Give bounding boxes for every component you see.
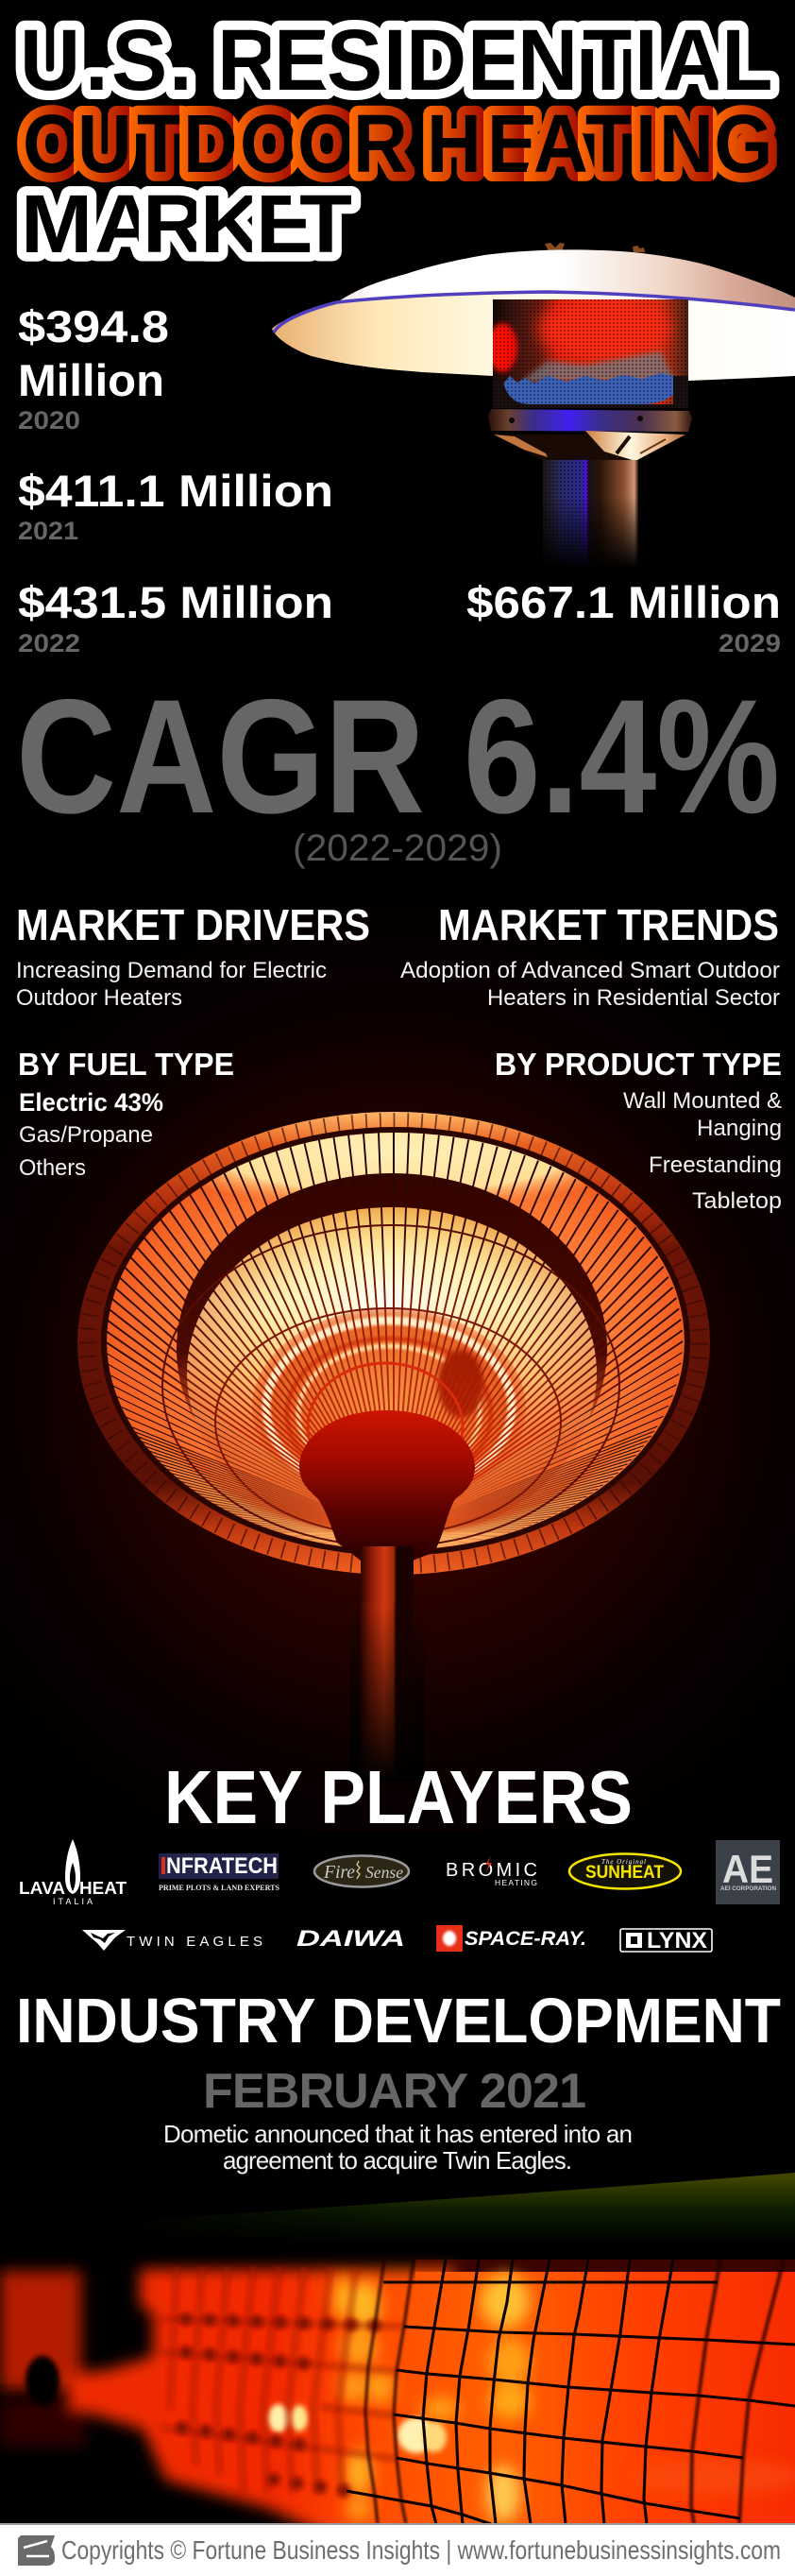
product list: Wall Mounted &	[623, 1088, 782, 1114]
value 2021: $411.1 Million	[18, 466, 333, 516]
footer	[0, 2523, 795, 2576]
value 2020: $394.8	[18, 301, 169, 351]
CAGR period: (2022-2029)	[293, 827, 502, 869]
cone vent thin	[640, 439, 666, 453]
background glow	[0, 874, 795, 1833]
value 2029	[466, 577, 781, 657]
product list	[623, 1088, 782, 1214]
value 2029: 2029	[719, 629, 781, 657]
value 2020: 2020	[18, 406, 80, 435]
logo: AEI Corporation: AEI CORPORATION	[720, 1886, 776, 1892]
logo: Space-Ray	[436, 1925, 586, 1952]
product list: Hanging	[697, 1116, 782, 1141]
title	[20, 12, 773, 270]
dim lower left	[0, 2399, 85, 2447]
radial wires lower	[105, 1353, 683, 1544]
logo: Bromic	[446, 1856, 537, 1887]
development text: agreement to acquire Twin Eagles.	[223, 2146, 572, 2175]
development date: FEBRUARY 2021	[203, 2064, 586, 2119]
drivers heading: MARKET DRIVERS	[16, 900, 370, 949]
mesh dots	[493, 299, 688, 408]
central hub	[299, 1410, 475, 1561]
image: gas patio heater	[272, 243, 795, 568]
dark left blob	[25, 2356, 59, 2405]
fuel heading: BY FUEL TYPE	[18, 1047, 234, 1082]
logo: Infratech: PRIME PLOTS & LAND EXPERTS	[159, 1883, 279, 1892]
grey mesh zone	[521, 351, 675, 382]
market drivers	[16, 900, 370, 1011]
red hot patch	[487, 323, 517, 372]
dark inner crescent	[177, 1173, 607, 1421]
logo: AEI Corporation	[716, 1840, 780, 1904]
trends text	[400, 958, 780, 1011]
heater pole	[543, 460, 638, 567]
heater finials	[545, 243, 645, 252]
rim ticks	[88, 1121, 700, 1565]
value 2022	[18, 577, 333, 657]
market trends	[400, 900, 780, 1011]
key players heading: KEY PLAYERS	[164, 1755, 633, 1839]
logo: Sunheat: SUNHEAT	[585, 1863, 664, 1883]
value 2022: 2022	[18, 629, 80, 657]
heater collar	[488, 409, 692, 432]
blurred grid left	[161, 2267, 404, 2494]
cone vents	[617, 436, 630, 453]
radial wires upper	[107, 1133, 684, 1482]
pole fade	[538, 496, 644, 568]
fuel list: Electric 43%	[19, 1088, 163, 1117]
orange glow	[538, 297, 670, 361]
dark bottom corners	[493, 376, 688, 408]
image: heater close-up	[0, 2173, 795, 2541]
logo: Sunheat	[569, 1853, 681, 1889]
title line: Market: MARKET	[21, 178, 352, 270]
value 2021	[18, 466, 333, 545]
market size figures	[18, 301, 781, 657]
heater pole	[360, 1540, 414, 1776]
rim separator	[101, 1127, 690, 1556]
logo: Fire Sense: Sense	[365, 1863, 403, 1882]
value 2020: Million	[18, 355, 164, 405]
by product type	[495, 1047, 782, 1214]
collar rivets	[512, 418, 640, 420]
element body right, sharp	[415, 2272, 795, 2541]
heater cone	[494, 431, 686, 461]
title line: Outdoor Heating: OUTDOOR HEATING	[23, 97, 772, 190]
footer bar	[0, 2524, 795, 2576]
warm highlights	[331, 2275, 795, 2522]
concentric guard wires	[162, 1225, 619, 1546]
development text	[163, 2120, 633, 2175]
logo: Lynx: LYNX	[647, 1928, 707, 1953]
soft grid middle	[365, 2260, 414, 2524]
product list: Tabletop	[692, 1188, 782, 1214]
reflector dish	[105, 1092, 685, 1550]
logo: Twin Eagles	[82, 1930, 262, 1951]
fuel list: Gas/Propane	[19, 1122, 153, 1148]
pole fade	[349, 1606, 425, 1782]
trends text: Heaters in Residential Sector	[487, 985, 780, 1011]
logo: Lava Heat: LAVA	[19, 1879, 65, 1898]
logo: Space-Ray: SPACE-RAY.	[465, 1928, 586, 1950]
logo: Lava Heat	[19, 1839, 127, 1906]
logo: Infratech: NFRATECH	[166, 1853, 278, 1879]
shade purple rim	[274, 292, 795, 333]
drivers text	[16, 958, 327, 1011]
title line: U.S. Residential: U.S. RESIDENTIAL	[20, 12, 773, 109]
development text: Dometic announced that it has entered into an	[163, 2120, 633, 2148]
logo: Daiwa: DAIWA	[296, 1926, 405, 1952]
logo: Lynx	[620, 1928, 712, 1953]
heater shade underside	[272, 292, 795, 381]
fuel list	[19, 1088, 163, 1181]
drivers text: Increasing Demand for Electric	[16, 958, 327, 983]
logo: Fire Sense: Fire	[323, 1862, 355, 1883]
sharp grid right	[347, 2260, 795, 2524]
bright inner reflector	[187, 1207, 597, 1540]
logo: Bromic: BROMIC	[446, 1860, 537, 1881]
inner cone with coil	[252, 1309, 526, 1477]
product heading: BY PRODUCT TYPE	[495, 1047, 782, 1082]
footer logo	[18, 2535, 55, 2566]
value 2022: $431.5 Million	[18, 577, 333, 627]
pole top	[361, 1546, 414, 1603]
logo: Sunheat: The Original	[601, 1858, 646, 1866]
logo: Infratech	[159, 1853, 279, 1892]
logo: Lava Heat: HEAT	[79, 1879, 127, 1898]
logo: AEI Corporation: AE	[722, 1847, 773, 1891]
key player logos	[19, 1839, 780, 1953]
glowing element	[0, 2260, 795, 2541]
logo: Lava Heat: ITALIA	[53, 1897, 93, 1906]
heater shade top	[272, 249, 795, 329]
outer rim	[77, 1112, 710, 1575]
element body left, blurred	[68, 2269, 453, 2541]
value 2029: $667.1 Million	[466, 577, 781, 627]
right grid lines, soft	[691, 2260, 784, 2524]
value 2020	[18, 301, 169, 435]
logo: Bromic: HEATING	[495, 1878, 537, 1887]
image: electric radiant heater	[0, 979, 795, 1799]
hot spot	[247, 1217, 524, 1347]
by fuel type	[18, 1047, 234, 1181]
drivers text: Outdoor Heaters	[16, 985, 182, 1011]
coil shadow	[438, 1350, 483, 1418]
mesh base	[493, 299, 688, 408]
trends text: Adoption of Advanced Smart Outdoor	[400, 958, 780, 983]
maroon top edge	[415, 2260, 795, 2272]
product list: Freestanding	[649, 1152, 782, 1178]
value 2021: 2021	[18, 517, 78, 545]
blue flames	[503, 373, 673, 404]
blurred nodes left	[182, 2319, 375, 2491]
logo: Fire Sense	[314, 1855, 409, 1887]
dim left block	[0, 2271, 81, 2390]
green reflection streak	[94, 2173, 795, 2252]
lower rim highlight	[140, 1433, 651, 1548]
fuel list: Others	[19, 1155, 86, 1181]
logo: Twin Eagles: TWIN EAGLES	[127, 1934, 262, 1950]
heater burner cylinder	[487, 297, 688, 408]
